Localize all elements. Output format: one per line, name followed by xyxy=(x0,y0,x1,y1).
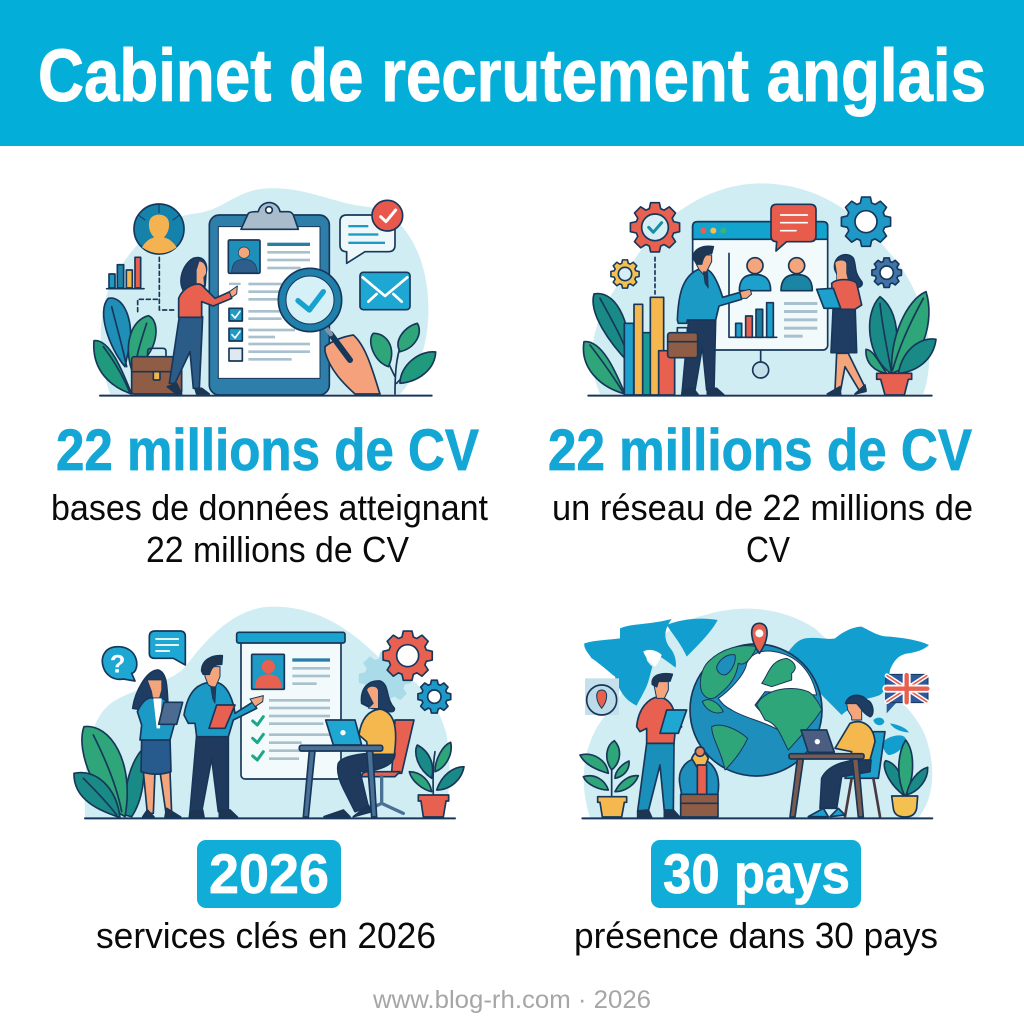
seated woman xyxy=(801,695,885,817)
screen chart xyxy=(729,253,777,337)
background blob xyxy=(584,609,932,818)
icon: potted plant xyxy=(866,292,936,395)
world map xyxy=(584,619,929,755)
stat heading: 22 millions de CV xyxy=(56,418,479,483)
icon: globe xyxy=(690,644,822,776)
man with clipboard xyxy=(184,656,263,817)
description: bases de données atteignant xyxy=(51,487,488,528)
icon: red gear with check xyxy=(630,203,680,252)
icon: location pin xyxy=(752,623,767,653)
icon: candidate avatar xyxy=(134,204,184,254)
icon: potted plant xyxy=(409,742,464,817)
icon: speech bubble with check xyxy=(340,200,403,263)
background blob xyxy=(592,183,929,394)
icon: man's briefcase xyxy=(668,328,698,358)
dashed connector xyxy=(138,257,175,312)
icon: desk xyxy=(299,745,383,817)
icon: chair xyxy=(360,720,414,813)
dashed connector xyxy=(652,257,657,294)
description second line: CV xyxy=(746,529,790,570)
icon: red gear xyxy=(383,631,432,680)
panel: network xyxy=(548,183,973,570)
footer: www.blog-rh.com · 2026 xyxy=(372,986,651,1014)
icon: blue gear xyxy=(418,680,451,713)
ground line xyxy=(588,393,932,399)
board xyxy=(237,632,345,779)
icon: small blue gear xyxy=(872,258,901,287)
CV text lines xyxy=(229,243,310,361)
illustration: recruiter reviewing a CV on a clipboard xyxy=(94,188,436,396)
icon: magnifying glass xyxy=(278,268,342,332)
illustration: global presence xyxy=(580,609,932,818)
icon: left plant xyxy=(74,726,144,818)
panel: CV database xyxy=(51,188,488,570)
description: services clés en 2026 xyxy=(96,915,436,956)
icon: message bubble xyxy=(149,631,185,665)
icon: question bubble xyxy=(102,647,137,681)
description: présence dans 30 pays xyxy=(574,915,938,956)
description second line: 22 millions de CV xyxy=(146,529,409,570)
woman with tablet xyxy=(133,670,183,817)
icon: question bubble: ? xyxy=(110,650,125,678)
screen stand xyxy=(753,350,769,378)
icon: blue gear xyxy=(841,197,891,246)
icon: yellow gear xyxy=(611,260,639,288)
icon: briefcase xyxy=(132,348,182,394)
icon: left plant xyxy=(583,294,630,394)
icon: left plant xyxy=(94,298,156,394)
icon: right plant xyxy=(371,323,436,394)
panel: services 2026 xyxy=(74,607,464,956)
icon: red speech bubble xyxy=(771,204,816,251)
ground line xyxy=(85,815,455,821)
man presenting xyxy=(677,246,752,395)
background blob xyxy=(101,188,428,394)
icon: location badge xyxy=(585,678,619,715)
illustration: team discussing services xyxy=(74,607,464,818)
faded gear xyxy=(359,652,411,705)
icon: left potted plant xyxy=(580,741,638,817)
panel: 30 countries xyxy=(574,609,938,956)
icon: desk xyxy=(789,754,864,817)
man with tablet xyxy=(637,674,687,817)
woman pointing at the clipboard xyxy=(167,258,237,394)
rising bars xyxy=(624,297,675,395)
header banner xyxy=(0,0,1024,146)
board text lines xyxy=(269,658,330,760)
ground line xyxy=(100,393,432,399)
screen text lines xyxy=(784,302,817,338)
icon: right potted plant xyxy=(884,740,928,817)
icon: clipboard xyxy=(209,203,329,395)
screen xyxy=(693,222,828,350)
board CV photo xyxy=(252,654,284,689)
screen avatars xyxy=(739,258,812,291)
stat badge: 2026 xyxy=(209,842,329,905)
stat badge: 30 pays xyxy=(663,842,850,905)
checklist xyxy=(229,308,242,361)
ground line xyxy=(582,815,932,821)
illustration: presenters at a dashboard screen xyxy=(583,183,936,396)
hand holding magnifier xyxy=(325,327,380,394)
background blob xyxy=(85,607,450,818)
description: un réseau de 22 millions de xyxy=(552,487,973,528)
luggage and gifts xyxy=(679,747,719,817)
icon: bar chart xyxy=(107,257,144,289)
icon: envelope xyxy=(360,272,410,310)
seated woman with laptop xyxy=(324,681,396,817)
CV photo xyxy=(228,240,260,273)
stat heading: 22 millions de CV xyxy=(548,418,972,483)
green checks xyxy=(253,717,263,760)
icon: UK flag bubble xyxy=(886,674,928,713)
woman with tablet xyxy=(817,255,866,395)
